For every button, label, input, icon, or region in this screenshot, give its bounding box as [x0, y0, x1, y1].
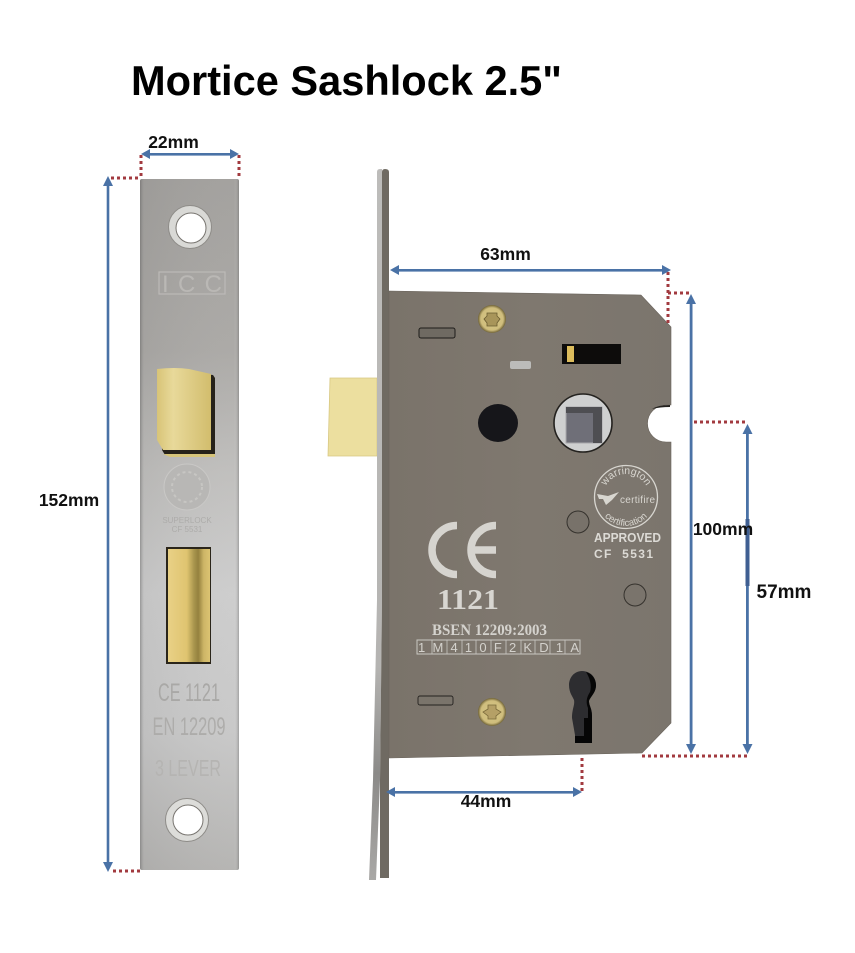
panel: front faceplate — [140, 179, 239, 870]
upper screw — [478, 305, 506, 333]
notch shadow — [652, 405, 670, 409]
engraved CE mark: CE 1121 — [158, 679, 220, 707]
panel: dimension annotations — [39, 132, 811, 872]
rivet two — [624, 584, 646, 606]
dimension arrow: 63mm — [390, 265, 671, 275]
keyhole — [569, 671, 596, 743]
certifire seal: certification — [606, 514, 647, 526]
bottom screw hole — [166, 798, 208, 842]
engraved standard: EN 12209 — [152, 713, 226, 741]
classification code boxes: 1M410F2KD1A — [418, 640, 579, 655]
certifire seal: warrington — [601, 466, 650, 486]
upper slot — [419, 328, 455, 338]
standard number: BSEN 12209:2003 — [432, 622, 547, 639]
label: 152mm: 152mm — [39, 490, 99, 510]
lock case — [389, 291, 671, 758]
title: Mortice Sashlock 2.5" — [131, 57, 562, 104]
faceplate edge shading — [140, 179, 239, 870]
label: 63mm: 63mm — [480, 244, 531, 264]
brass latch — [157, 368, 215, 457]
dimension arrow: 44mm — [386, 787, 582, 797]
rivet one — [567, 511, 589, 533]
certificate number: CF 5531 — [594, 547, 653, 561]
black spindle stop — [478, 404, 518, 442]
approved text: APPROVED — [594, 531, 661, 545]
forend plate — [369, 169, 389, 880]
engraved stamp — [162, 464, 212, 534]
lower slot — [418, 696, 453, 705]
engraved logo: ICC — [162, 271, 222, 298]
notified body number: 1121 — [437, 584, 499, 616]
engraved stamp: CF 5531 — [172, 525, 203, 534]
engraved stamp: SUPERLOCK — [162, 516, 212, 525]
CE mark — [432, 526, 496, 574]
dotted extension lines — [111, 155, 748, 871]
brass deadbolt — [166, 547, 211, 664]
dimension arrow: 100mm — [686, 294, 696, 754]
dimension arrow: 57mm — [742, 424, 752, 754]
lower screw — [478, 698, 506, 726]
certifire seal — [594, 464, 658, 530]
protruding latch — [328, 378, 377, 456]
label: 100mm: 100mm — [693, 519, 753, 539]
certifire seal: certifire — [620, 495, 655, 506]
top screw hole — [168, 206, 212, 248]
dimension arrow: 22mm — [141, 149, 239, 159]
label: 44mm: 44mm — [461, 791, 511, 811]
small slot — [510, 361, 531, 369]
black slot with brass pin — [562, 344, 621, 364]
label: 57mm: 57mm — [757, 582, 811, 603]
spindle follower — [554, 394, 612, 452]
dimension arrow: 152mm — [103, 176, 113, 872]
panel: side view of lock — [328, 169, 672, 880]
faceplate body — [140, 179, 239, 870]
engraved lever count: 3 LEVER — [155, 755, 221, 781]
label: 22mm: 22mm — [148, 132, 199, 152]
